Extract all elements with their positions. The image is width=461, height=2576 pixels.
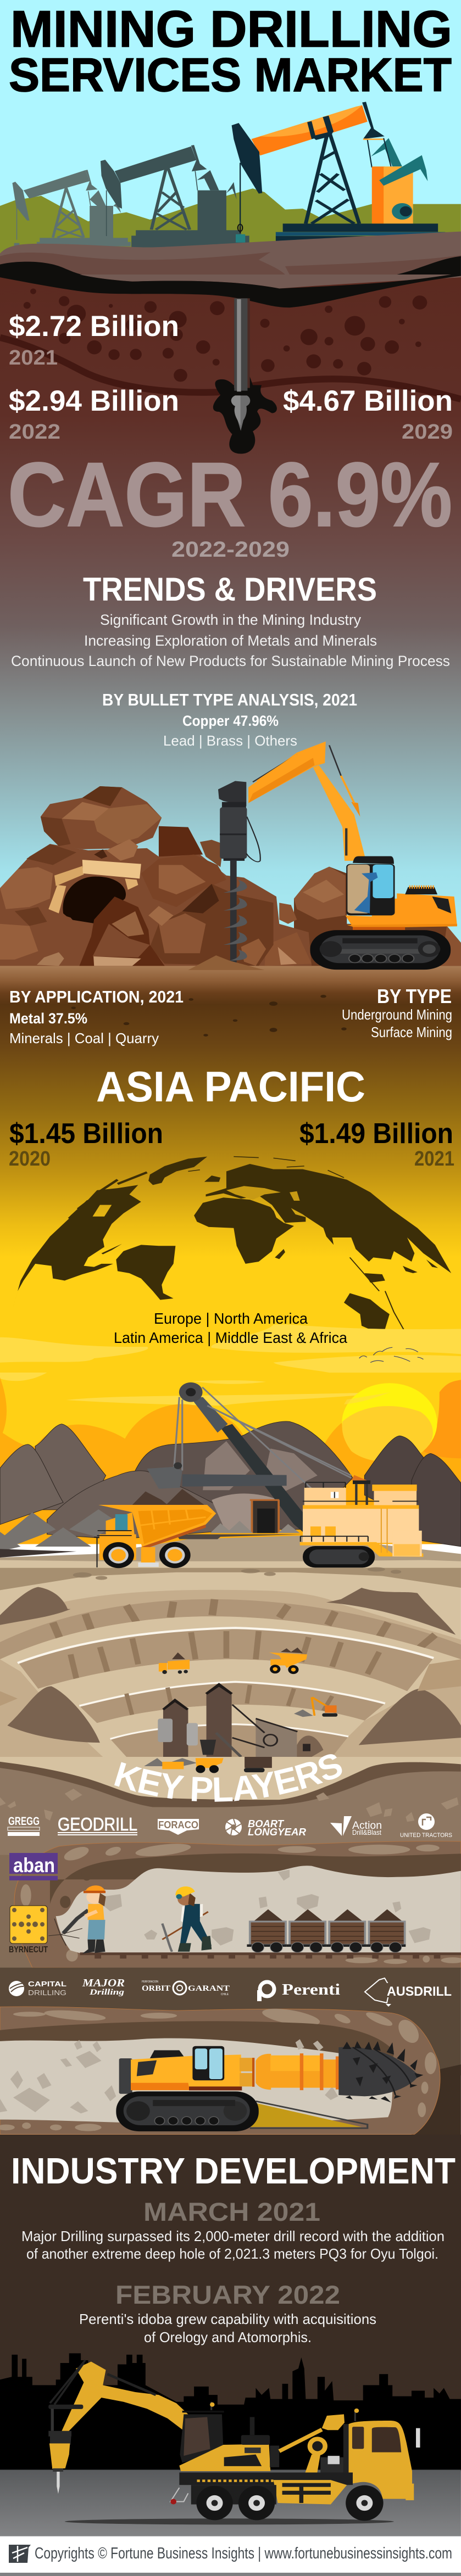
icon: mine head buildings bbox=[158, 1683, 323, 1757]
background: ground to yellow gradient bbox=[0, 1043, 461, 1259]
stat: 2029 value: 2029 bbox=[402, 421, 453, 444]
by application block bbox=[9, 987, 184, 1046]
logo: Boart Longyear bbox=[225, 1818, 306, 1838]
logo: Capital Drilling bbox=[9, 1980, 66, 1997]
logo: Boart Longyear: LONGYEAR bbox=[248, 1827, 306, 1838]
trends and drivers list: Significant Growth in the Mining Industry bbox=[100, 612, 361, 628]
icon: tunnel boring machine bbox=[116, 2041, 423, 2131]
panel: industry development bbox=[0, 2135, 461, 2536]
stat: 2020: $1.45 Billion bbox=[9, 1118, 163, 1150]
icon: mine tunnel with wooden frame bbox=[48, 860, 141, 924]
logo: Foraco: FORACO bbox=[158, 1819, 198, 1830]
logo: Aban: aban bbox=[13, 1854, 55, 1877]
mobile crusher bbox=[300, 1475, 423, 1567]
logo: Ausdrill bbox=[365, 1978, 453, 2007]
icon: ore carts bbox=[247, 1909, 406, 1952]
list: other regions: Latin America | Middle East & Africa bbox=[114, 1329, 347, 1346]
trends and drivers list bbox=[11, 612, 450, 669]
footer bbox=[0, 2536, 461, 2576]
stat: 2021 value: 2021 bbox=[9, 346, 58, 369]
by application block: BY APPLICATION, 2021 bbox=[9, 987, 184, 1006]
trends and drivers heading: TRENDS & DRIVERS bbox=[83, 571, 377, 608]
stat: 2021: 2021 bbox=[414, 1147, 454, 1171]
development: March 2021: Major Drilling surpassed its 2,000-meter drill record with the addition bbox=[21, 2228, 445, 2244]
logo: Foraco bbox=[158, 1819, 199, 1835]
logo: Orbit Garant: GARANT bbox=[188, 1984, 230, 1993]
icon: truck mounted excavator with breaker bbox=[48, 2360, 420, 2521]
icon: small trucks in pit bbox=[159, 1648, 337, 1717]
by type block: BY TYPE bbox=[377, 985, 452, 1007]
illustration: oil pumpjacks on hills bbox=[0, 102, 461, 287]
illustration: miners and ore carts bbox=[48, 1885, 423, 2131]
stat: 2022 value bbox=[9, 385, 179, 444]
icon: auger drill bbox=[218, 781, 260, 964]
logo: United Tractors: UNITED TRACTORS bbox=[400, 1832, 452, 1839]
development: February 2022: FEBRUARY 2022 bbox=[115, 2280, 340, 2309]
list: other regions bbox=[114, 1310, 347, 1346]
icon: birds bbox=[359, 1347, 423, 1363]
clouds bbox=[0, 1324, 461, 1373]
trends and drivers list: Increasing Exploration of Metals and Minerals bbox=[84, 632, 377, 649]
ground specks bbox=[71, 955, 347, 1037]
logo: Perenti bbox=[257, 1981, 340, 2001]
list: other regions: Europe | North America bbox=[154, 1310, 308, 1327]
logo: Orbit Garant: PERFORACION bbox=[142, 1980, 158, 1984]
logo: Gregg: GREGG bbox=[8, 1815, 40, 1828]
stat: 2029 value: $4.67 Billion bbox=[283, 385, 453, 417]
pit base vehicles bbox=[0, 1757, 461, 1806]
icon: Fortune Business Insights logo bbox=[9, 2545, 31, 2563]
by application block: Metal 37.5% bbox=[9, 1010, 87, 1027]
logo: Boart Longyear: BOART bbox=[248, 1818, 285, 1829]
logo: Action Drill and Blast bbox=[330, 1816, 382, 1836]
logo: Geodrill: GEODRILL bbox=[58, 1814, 137, 1834]
dump truck bbox=[94, 1505, 216, 1568]
logo: Ausdrill: AUSDRILL bbox=[387, 1984, 452, 1999]
by type block bbox=[342, 985, 452, 1040]
panel: Asia Pacific bbox=[0, 1062, 461, 1532]
stat: 2021 bbox=[299, 1118, 454, 1171]
stat: 2020: 2020 bbox=[9, 1147, 51, 1171]
ground layers bbox=[0, 232, 461, 287]
panel: surface mine scene bbox=[0, 1373, 461, 1757]
logo: Orbit Garant bbox=[142, 1980, 230, 1996]
illustration: open pit terraces bbox=[0, 1382, 461, 1757]
stat: 2022 value: $2.94 Billion bbox=[9, 385, 179, 417]
icon: miner with jackhammer bbox=[48, 1885, 106, 1953]
bullet type values: Lead | Brass | Others bbox=[163, 732, 297, 749]
title: MINING DRILLING bbox=[10, 0, 452, 58]
panel: key players rock layers bbox=[0, 1754, 461, 2135]
title bbox=[9, 0, 452, 102]
stat: 2021 value bbox=[9, 310, 179, 369]
bullet type values bbox=[163, 713, 297, 749]
bullet type values: Copper 47.96% bbox=[182, 713, 279, 729]
logo: Major Drilling bbox=[82, 1977, 125, 1997]
illustration: rock strata and caves bbox=[0, 1762, 461, 2141]
icon: miner with pickaxe bbox=[162, 1886, 212, 1952]
illustration: rock pile with tunnel bbox=[0, 742, 461, 1037]
logo: Major Drilling: Drilling bbox=[89, 1988, 125, 1997]
development: February 2022: of Orelogy and Atomorphis. bbox=[144, 2329, 312, 2345]
icon: excavator with bucket and dump truck bbox=[94, 1382, 423, 1568]
stat: 2020 bbox=[9, 1118, 163, 1171]
panel: rocks and excavator drill bbox=[0, 742, 461, 1046]
logo: Gregg bbox=[8, 1815, 40, 1836]
development: March 2021: of another extreme deep hole of 2,021.3 meters PQ3 for Oyu Tolgoi. bbox=[26, 2245, 438, 2262]
development: February 2022: Perenti's idoba grew capability with acquisitions bbox=[79, 2311, 376, 2327]
development: February 2022 bbox=[79, 2280, 376, 2345]
logo: Orbit Garant: CHILE bbox=[221, 1993, 229, 1996]
spoil heaps bbox=[0, 1587, 461, 1745]
logo: Capital Drilling: DRILLING bbox=[28, 1989, 66, 1997]
bullet type heading: BY BULLET TYPE ANALYSIS, 2021 bbox=[102, 690, 357, 709]
by application block: Minerals | Coal | Quarry bbox=[9, 1030, 159, 1046]
logo: United Tractors bbox=[400, 1813, 452, 1839]
stat: 2029 value bbox=[283, 385, 453, 444]
icon: front pumpjack bbox=[232, 102, 446, 243]
heading: key players: KEY PLAYERS bbox=[114, 1754, 342, 1802]
logo: Major Drilling: MAJOR bbox=[82, 1977, 125, 1989]
panel: header with pumpjacks bbox=[0, 0, 461, 287]
trends and drivers list: Continuous Launch of New Products for Sustainable Mining Process bbox=[11, 653, 450, 669]
heading: Asia Pacific: ASIA PACIFIC bbox=[96, 1062, 365, 1111]
icon: tracked excavator bbox=[248, 742, 457, 970]
logo: Action Drill and Blast: Action bbox=[352, 1820, 382, 1832]
logo: Action Drill and Blast: Drill&Blast bbox=[352, 1828, 381, 1836]
logo: Orbit Garant: ORBIT bbox=[142, 1984, 170, 1993]
CAGR: 2022-2029 bbox=[171, 537, 290, 562]
title: SERVICES MARKET bbox=[9, 49, 452, 102]
logo: Byrnecut bbox=[9, 1906, 48, 1955]
stat: 2022 value: 2022 bbox=[9, 421, 60, 444]
stat: 2021 value: $2.72 Billion bbox=[9, 310, 179, 343]
logo: Perenti: Perenti bbox=[282, 1981, 340, 1998]
illustration: sky, sun and mountains bbox=[0, 1373, 461, 1757]
development: March 2021: MARCH 2021 bbox=[143, 2197, 320, 2226]
development: March 2021 bbox=[21, 2197, 445, 2262]
logo: Byrnecut: BYRNECUT bbox=[9, 1945, 48, 1955]
illustration: city skyline and road bbox=[0, 2353, 461, 2536]
logo: Capital Drilling: CAPITAL bbox=[28, 1980, 66, 1988]
illustration: world globe silhouette bbox=[11, 1157, 451, 1333]
illustration: underground drill bbox=[0, 275, 461, 454]
panel: market size and CAGR bbox=[0, 275, 461, 977]
